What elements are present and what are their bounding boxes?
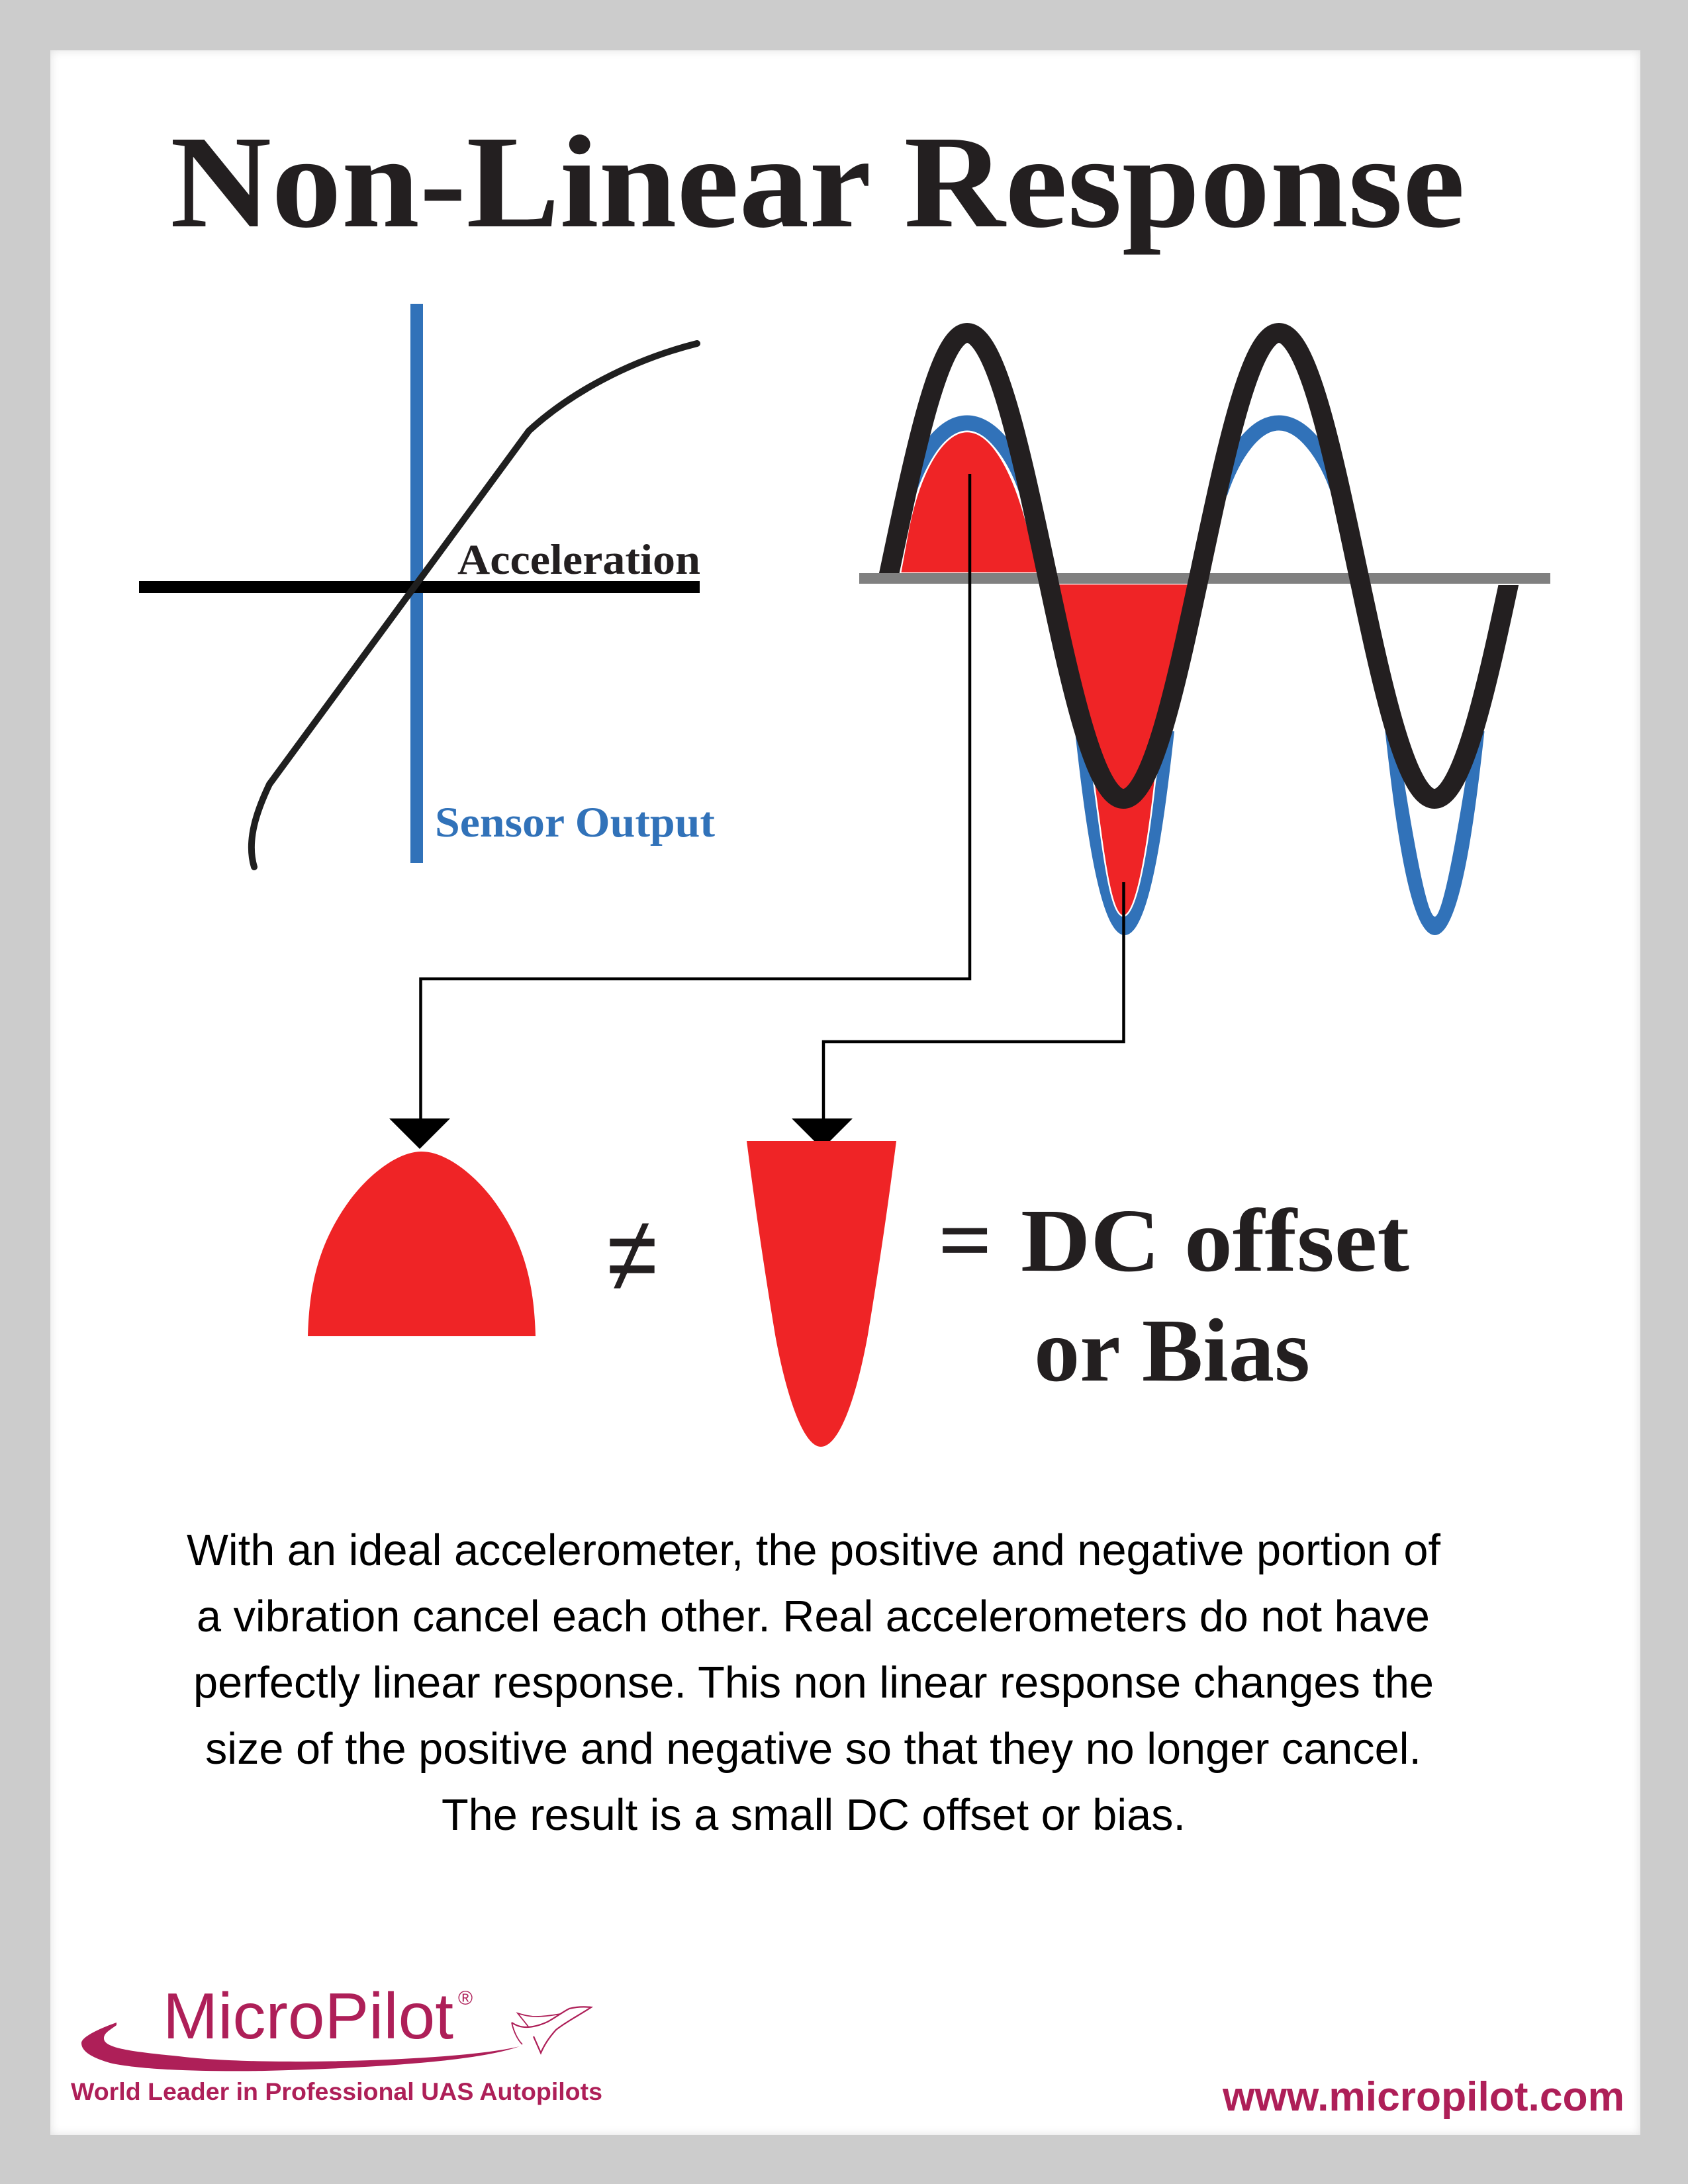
title: Non-Linear Response	[170, 109, 1465, 255]
chart: sensor response curve	[139, 304, 715, 867]
arrow: positive area to dome	[389, 474, 970, 1149]
horizontal axis: acceleration	[139, 581, 700, 593]
red dome shape	[308, 1152, 536, 1336]
result label	[938, 1189, 1409, 1400]
explanatory text block: The result is a small DC offset or bias.	[442, 1790, 1186, 1840]
red tongue shape	[747, 1141, 896, 1447]
explanatory text block: a vibration cancel each other. Real accelerometers do not have	[197, 1592, 1430, 1641]
website url: www.micropilot.com	[1222, 2074, 1624, 2120]
arrow: negative area to tongue	[792, 882, 1124, 1149]
label: or Bias: or Bias	[1034, 1301, 1310, 1400]
explanatory text block: size of the positive and negative so that they no longer cancel.	[205, 1724, 1421, 1774]
explanatory text block: perfectly linear response. This non linear response changes the	[193, 1658, 1434, 1707]
ideal blue wave fragments	[908, 423, 1484, 935]
explanatory text block	[187, 1525, 1440, 1840]
label: DC offset: DC offset	[1021, 1191, 1409, 1291]
red negative area	[1053, 584, 1196, 916]
chart: sine waves	[813, 333, 1591, 935]
logo tagline: World Leader in Professional UAS Autopilots	[71, 2078, 602, 2105]
logo: MicroPilot	[71, 1979, 602, 2105]
axis label: sensor output: Sensor Output	[435, 799, 715, 846]
logo wordmark: MicroPilot	[163, 1979, 453, 2052]
axis label: acceleration: Acceleration	[457, 536, 700, 584]
explanatory text block: With an ideal accelerometer, the positive and negative portion of	[187, 1525, 1440, 1575]
not equal sign: ≠	[607, 1194, 657, 1314]
equals sign: =	[938, 1189, 992, 1291]
vertical axis: sensor output	[410, 304, 423, 863]
icon: plane outline	[512, 2007, 591, 2053]
registered mark: ®	[458, 1987, 473, 2009]
red positive area	[900, 432, 1043, 573]
black measured wave	[879, 323, 1519, 809]
grey baseline	[859, 573, 1550, 584]
logo swoosh	[81, 2023, 520, 2071]
response curve	[252, 343, 697, 867]
